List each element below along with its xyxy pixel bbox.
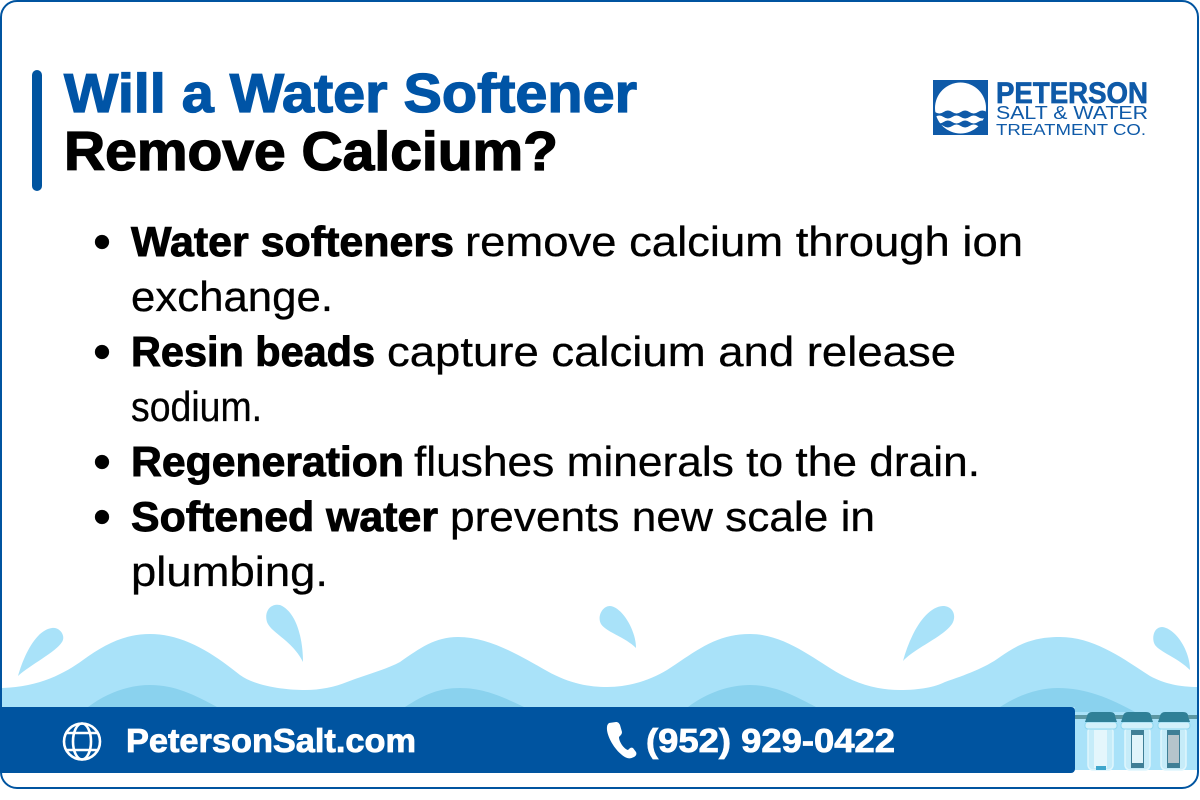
- bullet 4: softened water: plumbing.: [131, 548, 328, 595]
- bullet 1: water softeners: Water softeners: [131, 218, 454, 265]
- bullet 2: resin beads: [95, 328, 956, 430]
- website: PetersonSalt.com: [126, 722, 416, 759]
- logo: Peterson Salt & Water Treatment Co.: TREATMENT CO.: [996, 122, 1146, 139]
- water drop splash 4: [903, 606, 954, 661]
- water filter units: [1075, 712, 1197, 770]
- title: [64, 62, 637, 182]
- bullet 1: water softeners: exchange.: [131, 273, 333, 320]
- bullet 3: regeneration: flushes minerals to the drain.: [414, 438, 980, 485]
- water drop splash 3: [600, 606, 636, 648]
- bullet 2: resin beads: capture calcium and release: [387, 328, 956, 375]
- title: Will a Water Softener: [64, 62, 637, 124]
- logo: Peterson Salt & Water Treatment Co.: [933, 77, 1148, 139]
- water waves: [2, 634, 1198, 770]
- bullet 1: water softeners: remove calcium through ion: [465, 218, 1023, 265]
- water drop splash 5: [1153, 627, 1190, 670]
- bullet list: [95, 218, 1023, 595]
- bullet 3: regeneration: Regeneration: [131, 438, 404, 485]
- title: Remove Calcium?: [64, 120, 558, 182]
- water drop splash 1: [18, 628, 63, 676]
- logo: Peterson Salt & Water Treatment Co.: PETERSON: [996, 77, 1148, 110]
- bullet 2: resin beads: sodium.: [131, 383, 262, 430]
- water drop splash 2: [266, 605, 303, 662]
- bullet 3: regeneration: [95, 438, 980, 485]
- bullet 4: softened water: [95, 493, 875, 595]
- title accent bar: [32, 70, 42, 191]
- icon: phone: [607, 722, 636, 758]
- icon: globe: [64, 724, 100, 760]
- bullet 1: water softeners: [95, 218, 1023, 320]
- bullet 4: softened water: prevents new scale in: [450, 493, 875, 540]
- filter 2: [1121, 712, 1153, 770]
- filter 3: [1158, 712, 1190, 770]
- filter 1: [1085, 712, 1117, 770]
- footer contact bar: [0, 707, 1075, 773]
- logo: Peterson Salt & Water Treatment Co.: SALT & WATER: [996, 103, 1148, 123]
- bullet 4: softened water: Softened water: [131, 493, 438, 540]
- pipe: [1075, 715, 1197, 719]
- phone number: (952) 929-0422: [646, 722, 895, 759]
- bullet 2: resin beads: Resin beads: [131, 328, 375, 375]
